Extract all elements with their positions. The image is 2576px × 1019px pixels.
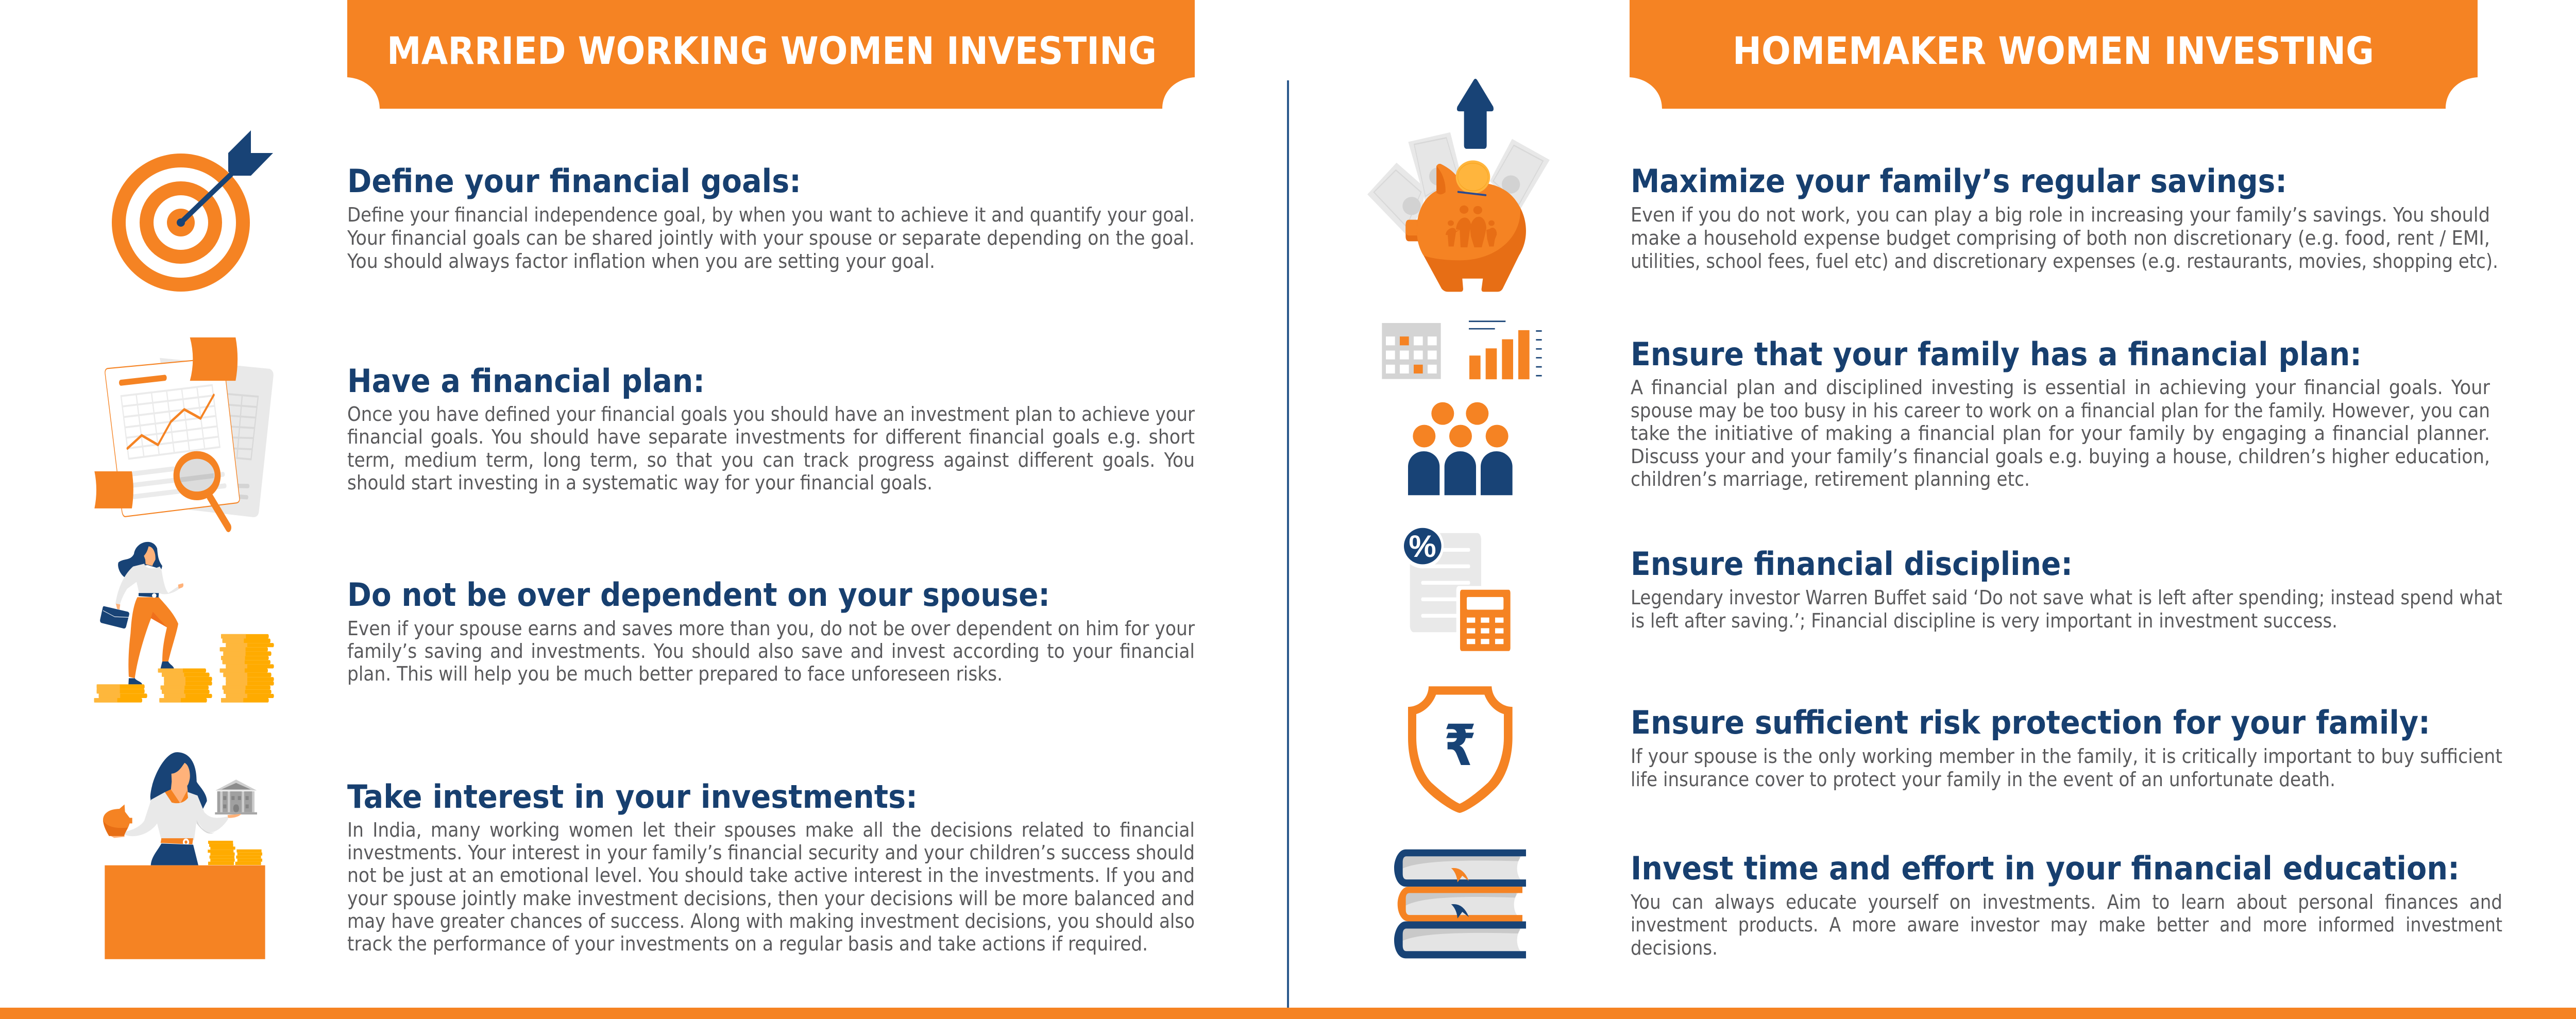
text block: take interest in your investments: investments. Your interest in your family’s financial security and your children’s success should bbox=[347, 841, 1195, 864]
banner: married working women investing bbox=[347, 0, 1195, 109]
icon: woman with piggy bank, bank building and coins at desk bbox=[103, 752, 265, 959]
icon: rupee shield bbox=[1408, 686, 1513, 813]
text block: ensure that your family has a financial plan: Ensure that your family has a financial plan: bbox=[1631, 335, 2362, 373]
text block: define your financial goals: You should always factor inflation when you are setting your goal. bbox=[347, 250, 935, 273]
bar chart bbox=[1469, 321, 1542, 379]
text block: define your financial goals: Define your financial goals: bbox=[347, 162, 801, 200]
text block: ensure that your family has a financial plan: children’s marriage, retirement planning etc. bbox=[1631, 468, 2030, 490]
text block: do not be over dependent on your spouse: Do not be over dependent on your spouse: bbox=[347, 576, 1050, 614]
text block: have a financial plan: Once you have defined your financial goals you should have an investment plan to achieve your bbox=[347, 403, 1195, 426]
text block: have a financial plan: financial goals. You should have separate investments for different financial goals e.g. short bbox=[347, 426, 1195, 448]
icon: percent document and calculator bbox=[1403, 526, 1511, 653]
text block: take interest in your investments: not be just at an emotional level. You should take active interest in the investments. If you and bbox=[347, 864, 1195, 887]
text block: ensure that your family has a financial plan: spouse may be too busy in his career to work on a financial plan for the family. However, you can bbox=[1631, 399, 2490, 422]
text block: do not be over dependent on your spouse bbox=[347, 576, 1195, 685]
text block: invest time and effort in your financial education: Invest time and effort in your financial education: bbox=[1631, 850, 2460, 887]
text block: maximize your family's regular savings: utilities, school fees, fuel etc) and discretionary expenses (e.g. restaurants, movies, shopping etc). bbox=[1631, 250, 2498, 273]
text block: take interest in your investments: Take interest in your investments: bbox=[347, 778, 918, 816]
panel: homemaker women bbox=[1367, 0, 2502, 959]
banner: married working women investing: MARRIED WORKING WOMEN INVESTING bbox=[387, 29, 1157, 73]
calendar bbox=[1382, 323, 1441, 379]
text block: ensure financial discipline bbox=[1631, 545, 2502, 632]
text block: define your financial goals: Your financial goals can be shared jointly with your spouse or separate depending on the goal. bbox=[347, 227, 1195, 249]
text block: ensure that your family has a financial plan: Discuss your and your family’s financial goals e.g. buying a house, children’s higher education, bbox=[1631, 445, 2490, 468]
banner: homemaker women investing: HOMEMAKER WOMEN INVESTING bbox=[1733, 29, 2374, 73]
text block: have a financial plan: should start investing in a systematic way for your financial goals. bbox=[347, 471, 933, 494]
icon: percent document and calculator: % bbox=[1409, 529, 1436, 564]
text block: ensure sufficient risk protection: life insurance cover to protect your family in the event of an unfortunate death. bbox=[1631, 768, 2335, 791]
text block: ensure that your family has a financial plan: take the initiative of making a financial plan for your family by engaging a financial planner. bbox=[1631, 422, 2490, 445]
text block: define your financial goals: Define your financial independence goal, by when you want to achieve it and quantify your goal. bbox=[347, 203, 1195, 226]
text block: define your financial goals bbox=[347, 162, 1195, 273]
footer bar bbox=[0, 1008, 2576, 1019]
text block: take interest in your investments: may have greater chances of success. Along with making investment decisions, you should also bbox=[347, 910, 1195, 932]
text block: maximize your family's regular savings: make a household expense budget comprising of both non discretionary (e.g. food, rent / EMI, bbox=[1631, 227, 2490, 249]
icon: rupee shield: ₹ bbox=[1444, 712, 1476, 778]
icon: stack of books bbox=[1394, 850, 1533, 958]
text block: ensure financial discipline: Ensure financial discipline: bbox=[1631, 545, 2073, 583]
text block: ensure sufficient risk protection: Ensure sufficient risk protection for your family: bbox=[1631, 704, 2430, 741]
text block: ensure financial discipline: Legendary investor Warren Buffet said ‘Do not save what is left after spending; instead spend what bbox=[1631, 586, 2502, 609]
family members bbox=[1408, 402, 1513, 495]
text block: do not be over dependent on your spouse: plan. This will help you be much better prepared to face unforeseen risks. bbox=[347, 663, 1003, 685]
text block: invest time and effort in your financial education: You can always educate yourself on investments. Aim to learn about personal finances and bbox=[1630, 891, 2502, 913]
text block: ensure sufficient risk protection bbox=[1631, 704, 2502, 791]
text block: ensure that your family has a financial plan bbox=[1631, 335, 2490, 490]
text block: take interest in your investments bbox=[347, 778, 1195, 955]
text block: take interest in your investments: your spouse jointly make investment decisions, then your decisions will be more balanced and bbox=[347, 887, 1195, 910]
text block: ensure sufficient risk protection: If your spouse is the only working member in the family, it is critically important to buy sufficient bbox=[1631, 745, 2502, 768]
text block: do not be over dependent on your spouse: Even if your spouse earns and saves more than you, do not be over dependent on him for your bbox=[347, 617, 1195, 640]
banner: homemaker women investing bbox=[1630, 0, 2478, 109]
text block: take interest in your investments: In India, many working women let their spouses make all the decisions related to financial bbox=[347, 819, 1195, 841]
text block: ensure financial discipline: is left after saving.’; Financial discipline is very important in investment success. bbox=[1631, 609, 2337, 632]
text block: do not be over dependent on your spouse: family’s saving and investments. You should also save and invest according to your financial bbox=[347, 640, 1195, 663]
text block: have a financial plan: term, medium term, long term, so that you can track progress against different goals. You bbox=[347, 449, 1195, 471]
icon: calendar, bar chart and family members bbox=[1382, 321, 1542, 495]
text block: ensure that your family has a financial plan: A financial plan and disciplined investing is essential in achieving your financial goals. Your bbox=[1631, 376, 2490, 399]
text block: invest time and effort in your financial education: decisions. bbox=[1631, 937, 1718, 959]
icon: financial plan document with magnifier bbox=[94, 337, 274, 528]
panel: married working women bbox=[94, 0, 1195, 959]
icon: piggy bank with family, bills, coin and up arrow bbox=[1367, 79, 1550, 292]
icon: woman climbing coin stacks bbox=[94, 542, 274, 703]
text block: have a financial plan bbox=[347, 362, 1195, 494]
text block: take interest in your investments: track the performance of your investments on a regular basis and take actions if required. bbox=[347, 932, 1148, 955]
text block: maximize your family's regular savings bbox=[1631, 162, 2498, 273]
icon: target with dart bbox=[112, 130, 273, 292]
text block: maximize your family's regular savings: Maximize your family’s regular savings: bbox=[1631, 162, 2287, 200]
text block: maximize your family's regular savings: Even if you do not work, you can play a big role in increasing your family’s savings. You should bbox=[1631, 203, 2490, 226]
text block: have a financial plan: Have a financial plan: bbox=[347, 362, 705, 400]
text block: invest time and effort in your financial education bbox=[1630, 850, 2502, 959]
